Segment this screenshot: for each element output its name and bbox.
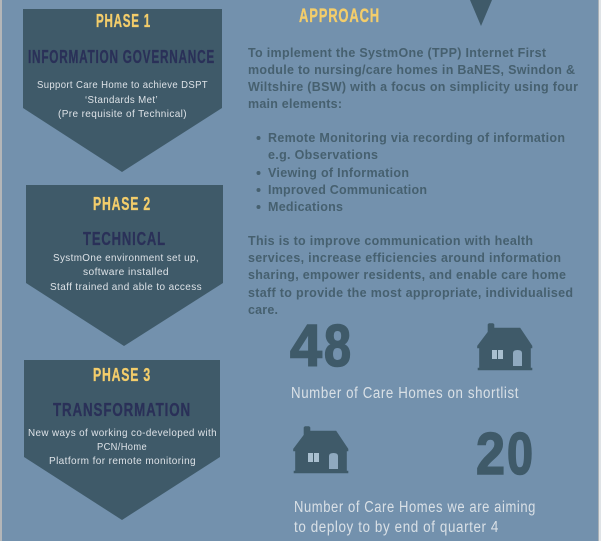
stat number: 20: 0 <box>507 421 533 487</box>
phase 3 heading: TRANSFORMATION <box>53 399 191 420</box>
phase 2 heading: TECHNICAL <box>83 228 166 249</box>
text block: purpose: staff to provide the most appropriate, individualised <box>248 286 573 300</box>
phase 1 description: ‘Standards Met’ <box>85 94 158 106</box>
phase 3 description: New ways of working co-developed with <box>28 427 217 439</box>
phase 1 label: PHASE 1 <box>96 11 151 31</box>
phase 1 description: (Pre requisite of Technical) <box>58 108 187 120</box>
stat number: 20: 2 <box>476 421 505 487</box>
text block: approach intro <box>248 46 578 111</box>
text block: approach intro: main elements: <box>248 97 342 111</box>
text block: purpose <box>248 234 573 317</box>
panel: phase 1 <box>23 9 222 172</box>
phase 3 description: PCN/Home <box>97 441 147 453</box>
stat label: deployment aim <box>294 499 536 536</box>
phase 2 description: software installed <box>83 266 169 278</box>
list: four main elements: e.g. Observations <box>268 148 378 162</box>
heading: approach: APPROACH <box>299 6 380 27</box>
arrow: top triangle <box>470 0 492 26</box>
stat label: deployment aim: Number of Care Homes we are aiming <box>294 499 536 516</box>
list: four main elements <box>256 131 565 214</box>
text block: approach intro: module to nursing/care homes in BaNES, Swindon & <box>248 63 575 77</box>
stat number: 48: 4 <box>290 313 322 379</box>
list: four main elements: Remote Monitoring via recording of information <box>268 131 565 145</box>
phase 2 description: SystmOne environment set up, <box>53 252 199 264</box>
phase 1 description: Support Care Home to achieve DSPT <box>37 79 208 91</box>
stat number: 48 <box>290 313 351 379</box>
text block: approach intro: Wiltshire (BSW) with a focus on simplicity using four <box>248 80 578 94</box>
phase 3 label: PHASE 3 <box>93 365 151 385</box>
icon: house bottom <box>294 426 348 473</box>
list: four main elements: Improved Communication <box>268 183 427 197</box>
phase 1 heading: INFORMATION GOVERNANCE <box>28 46 215 67</box>
text block: purpose: This is to improve communication with health <box>248 234 533 248</box>
phase 2 description <box>50 252 202 293</box>
text block: purpose: services, increase efficiencies around information <box>248 251 561 265</box>
phase 3 description <box>28 427 217 467</box>
list: four main elements: Viewing of Information <box>268 166 409 180</box>
icon: house top <box>478 324 532 370</box>
text block: purpose: care. <box>248 303 278 317</box>
stat label: deployment aim: to deploy to by end of quarter 4 <box>294 519 499 536</box>
text block: purpose: sharing, empower residents, and enable care home <box>248 268 566 282</box>
phase 3 description: Platform for remote monitoring <box>49 455 196 467</box>
phase 2 description: Staff trained and able to access <box>50 281 202 293</box>
panel: phase 3 <box>24 360 220 520</box>
panel: phase 2 <box>26 185 223 346</box>
stat number: 48: 8 <box>324 313 351 379</box>
phase 2 label: PHASE 2 <box>93 194 151 214</box>
stat number: 20 <box>476 421 533 487</box>
list: four main elements: Medications <box>268 200 343 214</box>
text block: approach intro: To implement the SystmOne (TPP) Internet First <box>248 46 547 60</box>
stat label: shortlist: Number of Care Homes on shortlist <box>291 385 519 402</box>
phase 1 description <box>37 79 208 120</box>
